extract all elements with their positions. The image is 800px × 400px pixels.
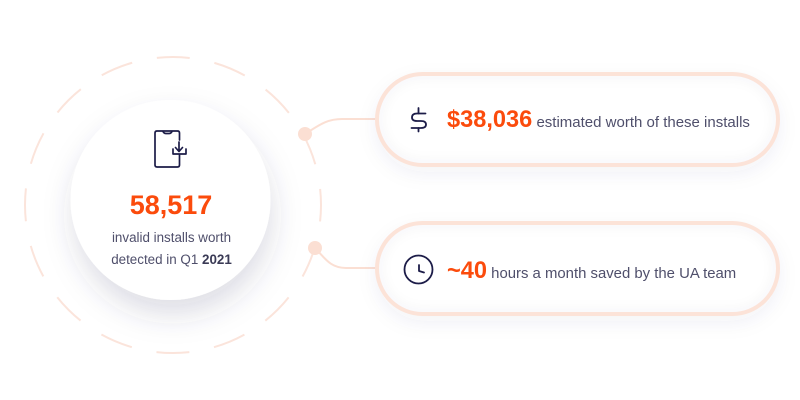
dashed ring [25, 57, 321, 353]
pill text: worth: $38,036 estimated worth of these installs [447, 107, 750, 133]
pill: worth [377, 74, 778, 165]
icon: clock [404, 256, 432, 284]
connector: top [298, 119, 376, 141]
pill text: hours: ~40 hours a month saved by the UA team [447, 258, 736, 284]
central circle [70, 100, 270, 300]
icon: phone download [155, 131, 186, 167]
central number: 58,517 [130, 190, 212, 220]
central caption: invalid installs worth [112, 230, 231, 245]
central caption [111, 230, 232, 267]
pill: hours [377, 223, 778, 314]
central caption: detected in Q1 2021 [111, 252, 232, 267]
icon: dollar [412, 108, 426, 132]
connector: bottom [308, 241, 376, 268]
